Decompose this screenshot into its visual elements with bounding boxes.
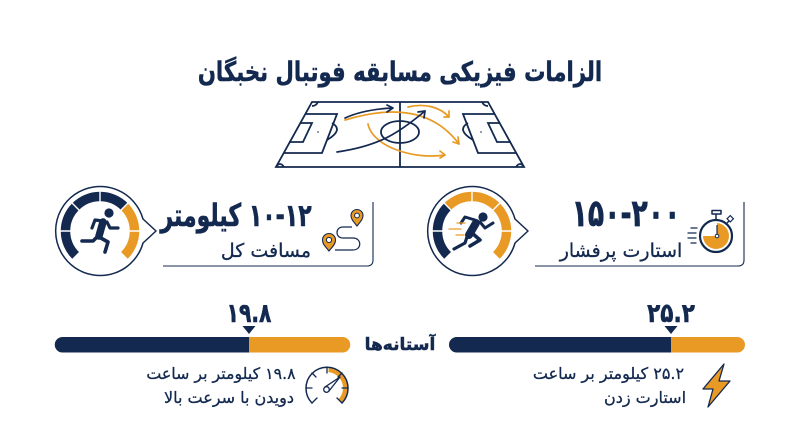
gauge segments <box>58 189 142 255</box>
panel: total distance <box>56 186 373 276</box>
panel frame <box>535 202 744 266</box>
pitch lines <box>276 102 524 167</box>
label: استارت پرفشار <box>559 240 682 262</box>
gauge bubble <box>56 186 156 276</box>
marker <box>242 326 256 334</box>
icon: route with pins <box>322 210 363 251</box>
thresholds label: آستانه‌ها <box>365 333 437 355</box>
icon: lightning bolt <box>703 364 730 407</box>
bar <box>55 337 249 352</box>
marker <box>664 326 678 334</box>
bar <box>449 337 671 352</box>
description <box>146 364 296 408</box>
arrows navy <box>337 105 425 152</box>
description: دویدن با سرعت بالا <box>164 388 294 408</box>
value: ۱۵۰-۲۰۰ <box>572 191 680 235</box>
description: ۲۵.۲ کیلومتر بر ساعت <box>533 364 684 384</box>
value: ۱۰-۱۲ کیلومتر <box>159 198 312 234</box>
icon: speedometer <box>306 367 348 403</box>
description: استارت زدن <box>604 388 686 408</box>
icon: runner <box>82 208 118 252</box>
panel: high intensity starts <box>428 186 744 276</box>
threshold bar: high speed running <box>55 297 350 408</box>
arrows orange <box>345 105 459 158</box>
gauge segments <box>430 189 514 255</box>
label: مسافت کل <box>221 240 311 262</box>
icon: stopwatch <box>688 210 733 252</box>
description <box>533 364 686 408</box>
title: الزامات فیزیکی مسابقه فوتبال نخبگان <box>198 55 602 88</box>
gauge bubble <box>428 186 528 276</box>
threshold bar: sprint <box>449 298 745 408</box>
football pitch diagram <box>276 102 524 167</box>
icon: sprinter <box>449 212 493 249</box>
panel frame <box>163 202 373 266</box>
value: ۱۹.۸ <box>227 297 272 329</box>
description: ۱۹.۸ کیلومتر بر ساعت <box>146 364 296 384</box>
value: ۲۵.۲ <box>647 298 695 329</box>
